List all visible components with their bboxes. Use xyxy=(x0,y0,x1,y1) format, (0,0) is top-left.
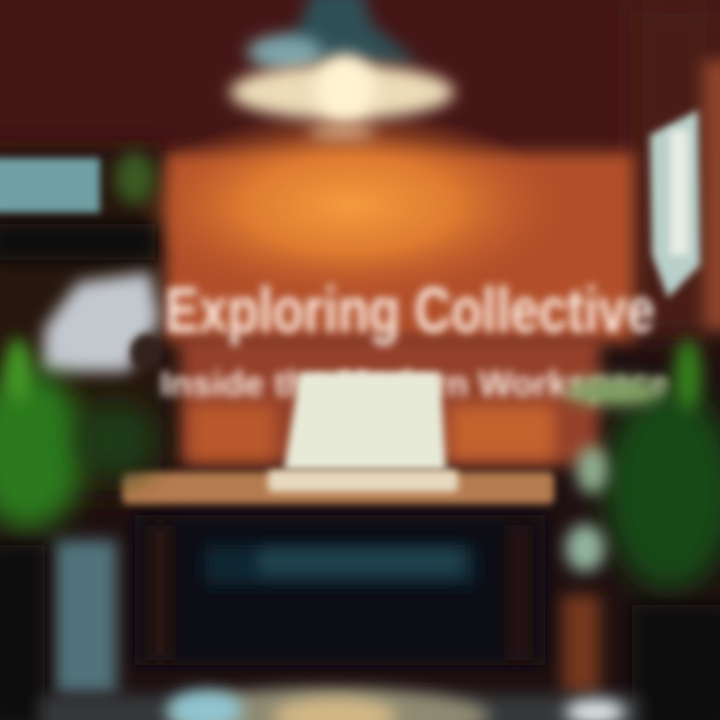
laptop xyxy=(268,372,458,492)
desk base xyxy=(135,515,545,665)
lamp xyxy=(230,0,454,140)
floor light reflection xyxy=(40,688,640,720)
right window xyxy=(650,110,700,298)
left shelf xyxy=(0,152,155,260)
right plant xyxy=(565,339,720,590)
left pillar xyxy=(55,540,117,695)
desk top xyxy=(122,472,554,504)
person figure xyxy=(42,272,162,372)
plant pot xyxy=(632,605,720,720)
panel: orange wall xyxy=(135,110,635,465)
title: blurred headline: Inside the Modern Workspace xyxy=(160,363,670,404)
left plant xyxy=(0,338,157,720)
right terracotta leg xyxy=(562,595,600,695)
title: blurred headline xyxy=(160,274,670,404)
